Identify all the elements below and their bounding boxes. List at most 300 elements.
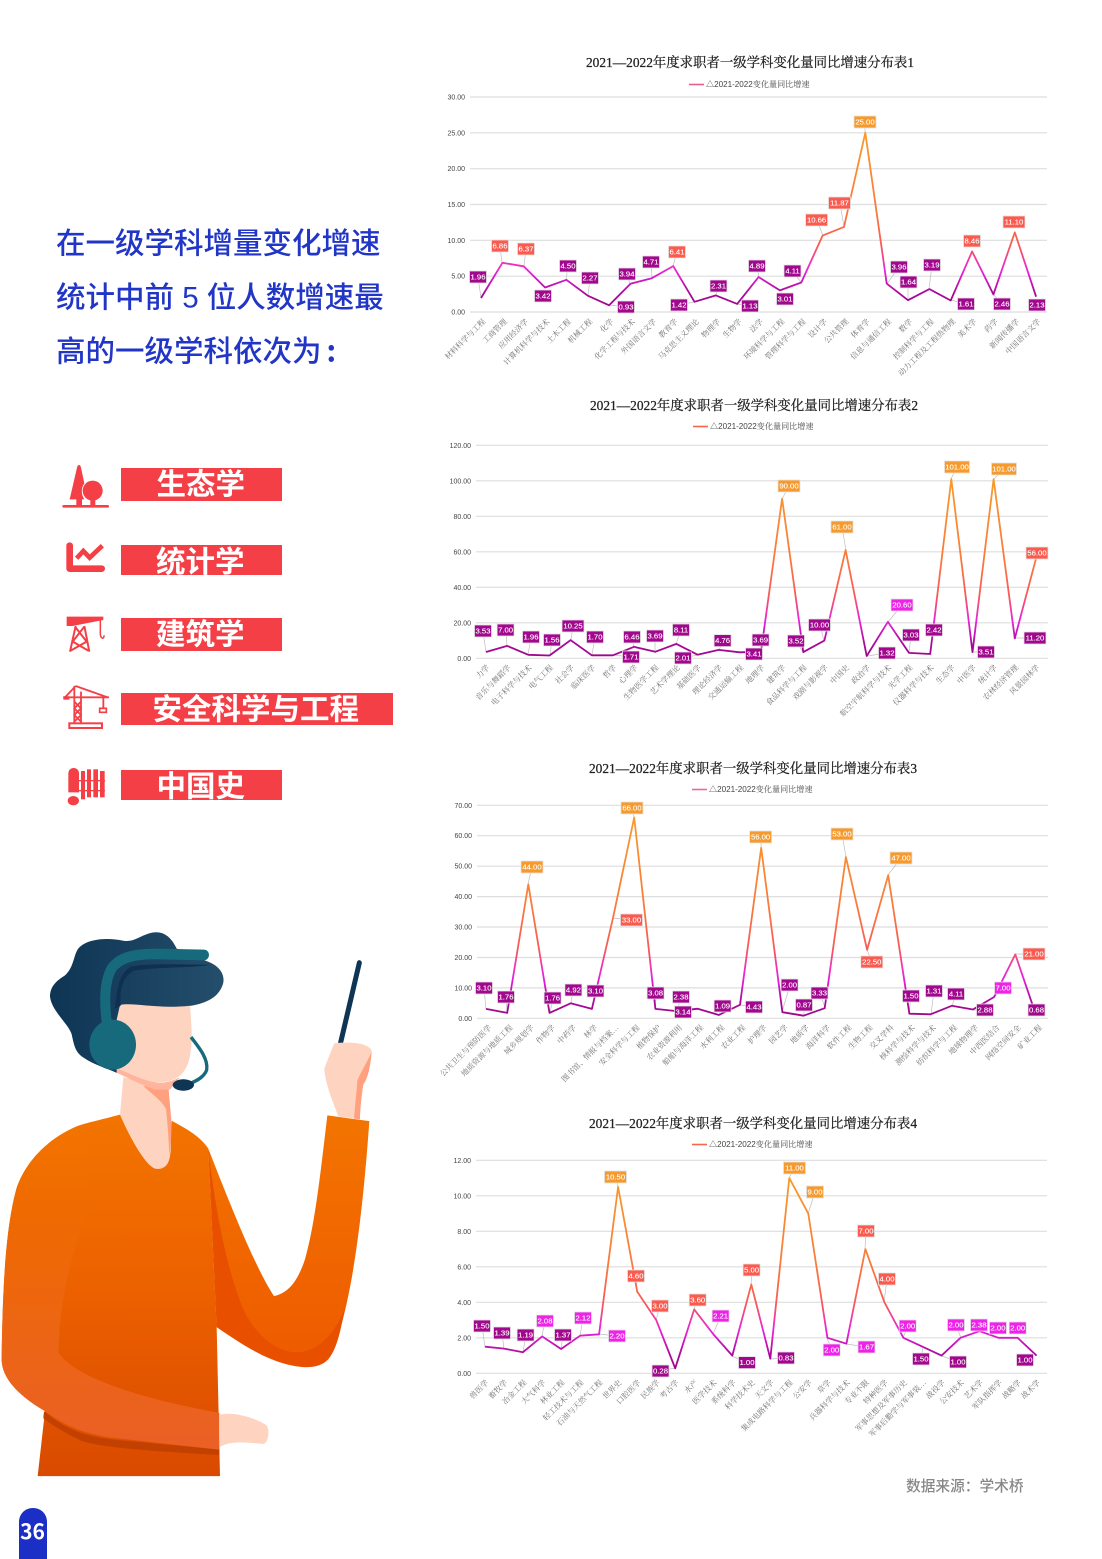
chart 4 line series [485,1178,1037,1368]
chart 4 data labels: 1.50 [914,1355,928,1364]
chart 3 data labels: 22.50 [862,958,881,967]
chart 2 x axis labels: 心理学 [616,662,640,686]
chart 2 data labels: 3.69 [648,632,662,641]
chart 2 x axis labels: 哲学 [600,662,619,680]
chart 4 data labels: 0.28 [653,1367,668,1376]
panel: chart 2 [450,397,1048,718]
chart 3 line series [486,818,1036,1016]
chart 3 x axis labels: 船舶与海洋工程 [660,1022,705,1067]
item 2: 统计学 [70,545,282,579]
chart 4 x axis labels: 系统科学 [709,1377,738,1406]
chart 4 x axis labels: 考古学 [657,1377,681,1401]
chart 3 x axis labels: 城乡规划学 [501,1022,536,1057]
chart 2 x axis labels: 航空宇航科学与技术 [837,662,894,718]
chart 4 x axis labels: 轻工技术与工程 [540,1377,586,1422]
chart 2 x axis labels: 食品科学与工程 [764,662,809,707]
chart 2 x axis labels: 仪器科学与技术 [890,662,936,707]
chart 1 data labels: 2.13 [1030,301,1044,310]
chart 1 data labels: 1.64 [901,278,917,287]
chart 2 x axis labels: 建筑学 [764,662,788,686]
chart 4 x axis labels: 公安技术 [937,1377,966,1406]
chart 3 data labels: 47.00 [891,854,911,863]
chart 1 data labels: 3.01 [778,295,792,304]
chart 2 y axis and grid: 0.00 [457,656,471,663]
chart 3 legend: △2021-2022变化量同比增速 [709,784,812,794]
chart 1 line series [481,133,1036,305]
chart 3 x axis labels: 中药学 [555,1022,578,1046]
chart 1 data labels: 25.00 [855,118,875,127]
chart 3 title: 2021—2022年度求职者一级学科变化量同比增速分布表3 [589,760,917,776]
chart 1 x axis labels: 信息与通信工程 [848,316,893,361]
chart 3 y axis and grid: 30.00 [454,924,472,932]
chart 2 x axis labels: 基础医学 [674,662,703,691]
chart 3 x axis labels: 林学 [581,1022,600,1040]
chart 4 x axis labels: 水产 [682,1377,700,1395]
chart 2 data labels: 3.69 [753,636,768,645]
chart 3 x axis labels: 纺织科学与工程 [914,1022,959,1067]
chart 3 data labels: 1.31 [927,987,941,996]
chart 1 x axis labels: 土木工程 [544,316,573,345]
chart 3 data labels: 0.68 [1029,1006,1044,1015]
chart 1 x axis labels: 数学 [896,316,915,334]
chart 2 x axis labels: 理论经济学 [690,662,724,697]
chart 2 data labels: 3.53 [476,627,490,636]
chart 3 x axis labels: 交叉学科 [867,1022,896,1051]
chart 1 x axis labels: 中国语言文学 [1003,316,1043,356]
chart 2 line series [486,479,1036,656]
chart 2 x axis labels: 生物医学工程 [621,662,661,702]
chart 2 data labels: 1.32 [880,649,894,658]
chart 2 x axis labels: 生态学 [933,662,957,686]
chart 2 x axis labels [473,662,1042,718]
chart 2 x axis labels: 音乐与舞蹈学 [473,662,513,702]
chart 4 x axis labels: 战役学 [924,1377,947,1401]
chart 2 y axis and grid: 100.00 [450,478,471,485]
chart 4 x axis labels: 冶金工程 [500,1377,529,1406]
chart 4 x axis labels: 科学技术史 [722,1377,757,1412]
chart 3 data labels: 44.00 [522,863,542,872]
ranking list: top five disciplines [62,465,393,805]
chart 2 data labels: 2.01 [676,654,690,663]
chart 2 data labels: 11.20 [1026,634,1044,643]
chart 4 x axis labels: 兵器科学与技术 [807,1377,852,1422]
chart 4 x axis labels: 专业不限 [842,1377,871,1406]
chart 2 title: 2021—2022年度求职者一级学科变化量同比增速分布表2 [590,397,918,413]
chart 2 data labels: 90.00 [779,482,799,491]
panel: chart 1 [442,54,1047,378]
chart 1 x axis labels: 美术学 [955,316,979,340]
chart 3 data labels: 3.33 [812,989,827,998]
chart 3 data labels: 3.10 [588,987,603,996]
chart 2 x axis labels: 艺术学理论 [648,662,682,697]
chart 3 x axis labels: 园艺学 [766,1022,790,1046]
chart 1 x axis labels: 法学 [747,316,765,334]
chart 1 data labels: 2.46 [995,300,1009,309]
chart 4 y axis and grid: 0.00 [457,1371,471,1378]
chart 4 x axis labels: 草学 [815,1377,833,1395]
chart 2 x axis labels: 政治学 [849,662,872,686]
chart 2 y axis and grid: 60.00 [453,549,471,556]
chart 3 x axis labels: 测绘科学与技术 [893,1022,938,1067]
chart 2 data labels: 20.60 [892,601,912,610]
chart 4 x axis labels: 口腔医学 [614,1377,643,1406]
chart 2 data labels: 4.76 [715,636,730,645]
chart 1 x axis labels: 公共管理 [822,316,851,345]
chart 4 x axis labels: 民族学 [638,1377,662,1401]
chart 3 data labels: 4.43 [747,1003,761,1012]
chart 2 x axis labels: 交通运输工程 [706,662,745,702]
chart 2 data labels [474,461,1048,664]
chart 1 y axis and grid: 20.00 [447,166,465,173]
chart 4 data labels: 1.00 [1018,1356,1032,1365]
chart 2 data labels: 101.00 [945,463,969,472]
chart 4 data labels: 2.00 [824,1346,839,1355]
chart 4 x axis labels: 大气科学 [519,1377,548,1406]
chart 4 data labels: 3.60 [690,1296,705,1305]
chart 1 x axis labels: 化学工程与技术 [592,316,637,361]
chart 3 y axis and grid: 10.00 [454,985,472,992]
chart 4 data labels: 2.12 [576,1314,590,1323]
chart 1 data labels: 3.94 [620,270,635,279]
label bar: 统计学 [156,546,245,579]
chart 1 x axis labels: 外国语言文学 [619,316,658,356]
chart 1 x axis labels: 体育学 [848,316,872,340]
chart 1 x axis labels: 药学 [982,316,1000,334]
panel: chart 4 [453,1115,1047,1439]
chart 3 data labels: 7.00 [996,984,1010,993]
chart 4 data labels: 1.00 [951,1358,965,1367]
chart 4 data labels: 2.21 [713,1312,728,1321]
chart 3 data labels: 1.50 [904,992,918,1001]
chart 3 x axis labels: 生物工程 [846,1022,875,1051]
label bar [121,545,282,579]
chart 1 data labels: 2.31 [711,282,726,291]
chart 3 data labels: 3.08 [648,989,663,998]
chart 2 x axis labels: 风景园林学 [1007,662,1042,697]
icon: crane [63,686,109,728]
chart 3 data labels: 3.14 [676,1008,691,1017]
chart 4 y axis and grid: 8.00 [457,1229,471,1236]
chart 1 data labels: 11.10 [1005,218,1023,227]
chart 3 data labels: 0.87 [797,1001,811,1010]
chart 1 data labels: 10.66 [807,216,826,225]
chart 4 data labels: 2.38 [972,1321,986,1330]
chart 4 y axis and grid: 12.00 [453,1158,471,1165]
chart 2 x axis labels: 地理学 [743,662,767,686]
chart 3 x axis labels [437,1022,1044,1084]
chart 4 data labels: 7.00 [859,1227,873,1236]
chart 2 y axis and grid: 120.00 [450,443,471,450]
chart 3 x axis labels: 地质资源与地质工程 [459,1022,515,1078]
chart 4 data labels: 2.00 [1010,1324,1025,1333]
chart 2 leader lines [483,467,1035,658]
chart 3 x axis labels: 矿业工程 [1015,1022,1044,1051]
chart 1 data labels: 1.96 [471,273,485,282]
label bar [121,770,282,804]
chart 4 data labels: 11.00 [785,1164,804,1173]
chart 3 x axis labels: 海洋科学 [803,1022,832,1051]
icon: scroll [68,768,105,805]
chart 3 leader lines [484,808,1034,1016]
chart 1 data labels: 2.27 [583,274,597,283]
chart 1 y axis and grid: 10.00 [447,238,465,245]
chart 2 data labels: 2.42 [927,626,941,635]
chart 3 data labels [476,802,1045,1018]
chart 1 legend: △2021-2022变化量同比增速 [706,79,809,89]
chart 4 y axis and grid [453,1158,1047,1378]
chart 2 x axis labels: 中国史 [828,662,851,686]
chart 1 x axis labels: 生物学 [720,316,744,340]
label bar [121,468,282,502]
chart 4 data labels: 1.67 [859,1343,874,1352]
chart 4 title: 2021—2022年度求职者一级学科变化量同比增速分布表4 [589,1115,917,1131]
chart 4 x axis labels: 兽医学 [467,1377,491,1401]
chart 3 data labels: 2.00 [782,981,797,990]
chart 4 x axis labels: 战略学 [1000,1377,1023,1401]
label bar: 生态学 [156,468,245,502]
chart 2 x axis labels: 临床医学 [568,662,597,691]
chart 2 legend: △2021-2022变化量同比增速 [710,421,813,431]
chart 4 x axis labels: 公安学 [790,1377,814,1401]
chart 2 y axis and grid: 80.00 [453,514,471,521]
chart 4 data labels: 2.00 [949,1321,963,1330]
chart 4 y axis and grid: 2.00 [457,1335,471,1342]
chart 3 data labels: 1.76 [499,993,513,1002]
chart 1 x axis labels: 材料科学与工程 [442,316,488,361]
chart 2 x axis labels: 戏剧与影视学 [790,662,830,702]
item 3: 建筑学 [67,617,282,652]
heading: 在一级学科增量变化增速 [56,228,381,260]
chart 3 data labels: 2.38 [674,993,688,1002]
item 1: 生态学 [62,465,282,508]
chart 3 data labels: 21.00 [1024,950,1044,959]
chart 4 x axis labels: 军事思想及军事历史 [853,1377,909,1433]
chart 1 y axis and grid: 0.00 [451,310,465,316]
chart 4 legend: △2021-2022变化量同比增速 [709,1139,812,1149]
chart 4 x axis labels: 天文学 [752,1377,776,1401]
chart 1 y axis and grid [447,94,1047,316]
chart 3 data labels: 56.00 [751,833,770,842]
chart 3 x axis labels: 水利工程 [697,1022,727,1051]
chart 4 data labels [474,1162,1034,1377]
chart 3 data labels: 1.09 [715,1002,730,1011]
chart 3 data labels: 2.88 [978,1006,992,1015]
chart 4 data labels: 1.19 [518,1331,533,1340]
chart 1 y axis and grid: 30.00 [447,94,465,102]
chart 3 data labels: 66.00 [622,804,642,813]
page number [19,1508,47,1559]
chart 2 data labels: 1.70 [588,633,602,642]
chart 3 y axis and grid: 0.00 [458,1016,472,1023]
chart 2 x axis labels: 电气工程 [526,662,555,691]
item 5: 中国史 [68,768,282,805]
chart 4 data labels: 1.00 [740,1358,754,1367]
chart 1 data labels: 4.11 [785,267,800,276]
chart 3 x axis labels: 核科学与技术 [877,1022,917,1062]
chart 4 x axis labels: 艺术学 [962,1377,985,1401]
icon: line chart [70,546,102,569]
chart 3 y axis and grid: 70.00 [454,803,472,810]
chart 3 x axis labels: 作物学 [534,1022,557,1046]
chart 2 data labels: 3.51 [979,648,993,657]
chart 1 x axis labels: 教育学 [656,316,680,340]
chart 3 x axis labels: 图书馆、情报与档案… [559,1022,620,1084]
chart 2 data labels: 7.00 [498,626,513,635]
chart 3 y axis and grid: 60.00 [454,833,472,840]
label bar [121,618,282,652]
chart 1 x axis labels: 机械工程 [565,316,594,345]
chart 1 x axis labels: 设计学 [806,316,829,340]
chart 4 x axis labels: 特种医学 [861,1377,890,1406]
chart 1 x axis labels: 环境科学与工程 [741,316,787,361]
chart 2 data labels: 1.71 [624,653,638,662]
chart 1 data labels: 4.71 [644,258,658,267]
chart 3 y axis and grid: 20.00 [454,955,472,962]
chart 2 data labels: 8.11 [674,626,688,635]
heading [56,228,384,370]
chart 2 data labels: 56.00 [1027,549,1047,558]
chart 1 x axis labels: 应用经济学 [496,316,530,351]
chart 4 y axis and grid: 6.00 [457,1264,471,1271]
chart 4 data labels: 2.08 [538,1317,552,1326]
chart 4 y axis and grid: 4.00 [457,1300,471,1307]
chart 3 x axis labels: 农业资源利用 [644,1022,684,1062]
chart 4 data labels: 1.37 [556,1331,570,1340]
chart 4 data labels: 4.00 [880,1275,894,1284]
chart 1 x axis labels: 动力工程及工程热物理 [896,316,957,378]
chart 4 x axis labels: 军队指挥学 [970,1377,1004,1412]
chart 4 x axis labels: 医学技术 [690,1377,719,1406]
icon: trees [62,465,109,508]
chart 2 x axis labels: 力学 [473,662,492,680]
chart 3 y axis and grid [454,803,1048,1023]
chart 4 data labels: 3.00 [653,1302,667,1311]
chart 4 x axis labels: 林业工程 [538,1377,567,1406]
chart 2 y axis and grid: 40.00 [453,585,471,592]
chart 3 data labels: 53.00 [832,830,852,839]
chart 1 data labels: 4.50 [561,262,575,271]
chart 1 data labels: 6.41 [670,248,684,257]
chart 4 y axis and grid: 10.00 [453,1193,471,1200]
chart 2 x axis labels: 光学工程 [886,662,915,691]
chart 3 data labels: 4.92 [566,986,581,995]
chart 1 x axis labels: 控制科学与工程 [891,316,936,361]
chart 4 data labels: 10.50 [606,1173,625,1182]
chart 1 data labels: 11.87 [830,199,849,208]
chart 2 x axis labels: 社会学 [553,662,576,686]
chart 1 leader lines [478,122,1002,307]
chart 1 y axis and grid: 5.00 [451,274,465,281]
chart 3 x axis labels: 网络空间安全 [983,1022,1023,1062]
chart 4 data labels: 2.00 [991,1324,1005,1333]
chart 2 x axis labels: 农林经济管理 [981,662,1020,702]
chart 1 data labels: 3.96 [892,263,906,272]
chart 3 x axis labels: 植物保护 [634,1022,663,1051]
chart 1 x axis labels: 管理科学与工程 [763,316,808,361]
chart 1 data labels: 1.42 [672,301,686,310]
chart 3 data labels: 4.11 [949,990,963,999]
chart 1 y axis and grid: 15.00 [447,202,465,209]
chart 4 data labels: 2.00 [900,1322,915,1331]
chart 2 x axis labels: 中医学 [955,662,978,686]
chart 2 data labels: 3.41 [747,650,761,659]
chart 1 x axis labels: 化学 [598,316,616,334]
label bar: 中国史 [156,770,245,804]
chart 2 y axis and grid: 20.00 [453,620,471,627]
chart 1 y axis and grid: 25.00 [447,130,465,137]
chart 1 x axis labels: 新闻传播学 [987,316,1021,351]
chart 1 x axis labels: 马克思主义理论 [656,316,701,361]
chart 4 data labels: 1.50 [475,1322,489,1331]
chart 4 x axis labels: 畜牧学 [486,1377,510,1401]
chart 1 x axis labels: 工商管理 [480,316,509,345]
chart 1 title: 2021—2022年度求职者一级学科变化量同比增速分布表1 [586,54,914,70]
chart 1 x axis labels: 计算机科学与技术 [501,316,552,367]
chart 4 data labels: 4.60 [629,1272,643,1281]
chart 4 x axis labels: 世界史 [600,1377,624,1401]
chart 3 x axis labels: 安全科学与工程 [596,1022,642,1067]
chart 4 x axis labels: 石油与天然气工程 [554,1377,605,1428]
chart 2 data labels: 6.46 [625,633,639,642]
icon: tower [67,617,104,652]
chart 4 data labels: 0.83 [779,1354,793,1363]
chart 2 data labels: 1.56 [545,636,559,645]
page number: 36 [20,1516,45,1546]
chart 1 x axis labels: 物理学 [699,316,723,340]
chart 4 x axis labels: 战术学 [1019,1377,1042,1401]
chart 3 x axis labels: 公共卫生与预防医学 [437,1022,494,1078]
heading: 统计中前 5 位人数增速最 [56,282,384,314]
chart 2 data labels: 61.00 [832,523,852,532]
chart 4 data labels: 5.00 [744,1266,759,1275]
chart 3 x axis labels: 地球物理学 [946,1022,981,1057]
data source: 数据来源：学术桥 [906,1477,1024,1495]
chart 4 leader lines [482,1168,980,1371]
chart 3 x axis labels: 地质学 [788,1022,811,1046]
panel: chart 3 [437,760,1048,1084]
chart 3 x axis labels: 护理学 [745,1022,769,1046]
chart 3 x axis labels: 软件工程 [824,1022,854,1051]
chart 2 data labels: 10.00 [810,621,829,630]
chart 1 data labels: 3.19 [925,261,939,270]
chart 1 data labels: 1.13 [743,302,757,311]
chart 3 x axis labels: 中西医结合 [967,1022,1002,1057]
label bar: 安全科学与工程 [152,694,359,726]
chart 4 data labels: 9.00 [808,1188,822,1197]
chart 3 x axis labels: 农业工程 [719,1022,748,1051]
chart 1 data labels: 4.89 [750,262,764,271]
chart 1 data labels: 0.93 [619,303,633,312]
chart 2 data labels: 3.03 [904,631,918,640]
chart 2 x axis labels: 统计学 [976,662,999,686]
illustration: man with headset holding pen [2,932,372,1476]
chart 2 x axis labels: 电子科学与技术 [489,662,534,707]
chart 2 y axis and grid [450,443,1048,663]
chart 3 y axis and grid: 40.00 [454,894,472,901]
chart 1 data labels: 6.86 [493,242,507,251]
chart 3 data labels: 1.76 [545,994,560,1003]
chart 1 data labels [470,116,1046,313]
chart 1 x axis labels [442,316,1043,378]
chart 2 data labels: 1.96 [524,633,538,642]
chart 3 y axis and grid: 50.00 [454,864,472,871]
chart 3 data labels: 33.00 [622,916,641,925]
chart 1 data labels: 1.61 [959,300,973,309]
chart 3 data labels: 3.10 [477,984,491,993]
chart 4 x axis labels: 军事后勤学与军事装… [866,1377,928,1439]
chart 4 data labels: 1.39 [495,1329,509,1338]
chart 4 x axis labels [467,1377,1042,1439]
